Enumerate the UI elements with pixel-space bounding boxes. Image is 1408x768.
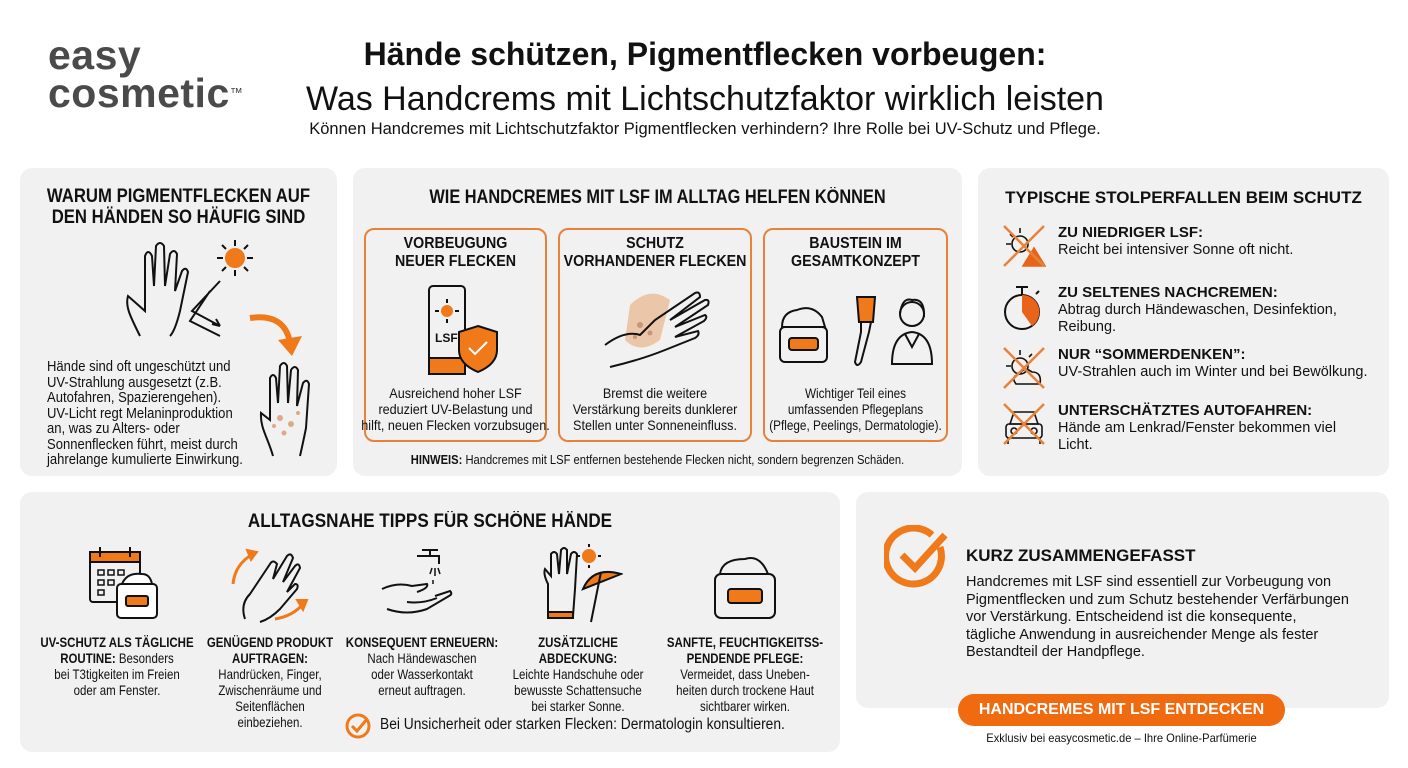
tip: renew: Nach Händewaschen (367, 650, 477, 666)
heading: pitfalls: TYPISCHE STOLPERFALLEN BEIM SCHUTZ (1005, 188, 1362, 207)
tip: renew: erneut auftragen. (378, 682, 466, 698)
text: causes (46, 359, 243, 468)
tip: renew: oder Wasserkontakt (371, 666, 473, 682)
logo (48, 32, 243, 116)
button: discover: HANDCREMES MIT LSF ENTDECKEN (979, 701, 1264, 718)
arrow (250, 314, 302, 356)
icon: jar, brush, doctor (779, 296, 933, 366)
title (306, 36, 1104, 118)
title: Was Handcrems mit Lichtschutzfaktor wirklich leisten (306, 80, 1104, 118)
title: Hände schützen, Pigmentflecken vorbeugen: (364, 36, 1046, 72)
card: prevention: Ausreichend hoher LSF (389, 385, 522, 401)
text: causes: jahrelange kumulierte Einwirkung. (47, 452, 243, 468)
card: prevention: reduziert UV-Belastung und (378, 401, 533, 417)
text: causes: UV-Strahlung ausgesetzt (z.B. (47, 374, 222, 390)
tip: routine: oder am Fenster. (74, 682, 160, 698)
heading: causes: WARUM PIGMENTFLECKEN AUF (47, 186, 310, 207)
text: summary: Pigmentflecken und zum Schutz bestehender Verfärbungen (966, 592, 1349, 608)
tip: care: sichtbarer wirken. (700, 698, 790, 714)
tip: cover: bei starker Sonne. (531, 698, 625, 714)
item: summer thinking (1003, 346, 1368, 389)
icon: hand with spots (260, 362, 310, 456)
card: concept: umfassenden Pflegeplans (788, 401, 923, 417)
tip: care: SANFTE, FEUCHTIGKEITSS- (667, 634, 823, 650)
panel: summary (856, 492, 1389, 708)
card: prevention: hilft, neuen Flecken vorzubsugen. (361, 417, 550, 433)
text: causes: Autofahren, Spazierengehen). (47, 390, 221, 406)
card: protection: Bremst die weitere (603, 385, 707, 401)
card: prevention: NEUER FLECKEN (395, 253, 516, 270)
icon: hand with sun rays (126, 240, 253, 337)
note: dermatologist: Bei Unsicherheit oder starken Flecken: Dermatologin konsultieren. (380, 716, 785, 733)
card: protection: VORHANDENER FLECKEN (564, 253, 746, 270)
tip: amount: einbeziehen. (237, 714, 303, 730)
logo: cosmetic™ (48, 70, 243, 116)
text: causes: an, was zu Alters- oder (47, 421, 180, 437)
text: summary: vor Verstärkung. Entscheidend ist die konsequente, (966, 609, 1296, 625)
item: reapply (1004, 284, 1337, 335)
heading: causes (46, 186, 310, 228)
card: protection: Stellen unter Sonneneinfluss. (573, 417, 737, 433)
card: protection: Verstärkung bereits dunklerer (573, 401, 737, 417)
icon: hand with spots (604, 292, 710, 368)
item: driving: UNTERSCHÄTZTES AUTOFAHREN: (1058, 402, 1312, 419)
text: summary: Bestandteil der Handpflege. (966, 644, 1145, 660)
item: driving (1003, 402, 1336, 453)
note: dermatologist (346, 714, 785, 738)
tip: amount: Zwischenräume und (218, 682, 322, 698)
subtitle: Können Handcremes mit Lichtschutzfaktor Pigmentflecken verhindern? Ihre Rolle bei UV-Schutz und Pflege. (309, 120, 1101, 138)
item: reapply: ZU SELTENES NACHCREMEN: (1058, 284, 1278, 301)
item: driving: Licht. (1058, 437, 1093, 453)
item: low spf (1003, 224, 1293, 267)
card: concept: BAUSTEIN IM (809, 235, 902, 252)
text: summary (966, 574, 1349, 660)
card: concept (763, 228, 948, 442)
card: concept: (Pflege, Peelings, Dermatologie). (769, 417, 942, 433)
item: low spf: Reicht bei intensiver Sonne oft nicht. (1058, 242, 1293, 258)
heading: help: WIE HANDCREMES MIT LSF IM ALLTAG HELFEN KÖNNEN (429, 187, 886, 208)
note: HINWEIS: Handcremes mit LSF entfernen bestehende Flecken nicht, sondern begrenzen Schäden. (411, 452, 904, 467)
tip: care (667, 557, 823, 714)
heading: summary: KURZ ZUSAMMENGEFASST (966, 546, 1196, 565)
text: summary: Handcremes mit LSF sind essentiell zur Vorbeugung von (966, 574, 1331, 590)
text: causes: Hände sind oft ungeschützt und (47, 359, 231, 375)
text: summary: tägliche Anwendung in ausreichender Menge als fester (966, 626, 1318, 642)
item: summer thinking: NUR “SOMMERDENKEN”: (1058, 346, 1246, 363)
logo: easy (48, 32, 141, 78)
tip: care: heiten durch trockene Haut (676, 682, 814, 698)
tip: care: Vermeidet, dass Uneben- (680, 666, 810, 682)
card: concept: Wichtiger Teil eines (805, 385, 906, 401)
panel: causes (20, 168, 337, 476)
tip: amount: GENÜGEND PRODUKT (207, 634, 333, 650)
tip: care: PENDENDE PFLEGE: (687, 650, 803, 666)
tip: amount: Seitenflächen (235, 698, 305, 714)
card: prevention: VORBEUGUNG (404, 235, 507, 252)
panel: pitfalls (978, 168, 1389, 476)
tip: cover: Leichte Handschuhe oder (513, 666, 643, 682)
item: low spf: ZU NIEDRIGER LSF: (1058, 224, 1203, 241)
item: reapply: Abtrag durch Händewaschen, Desinfektion, (1058, 302, 1337, 318)
tip: amount (207, 548, 333, 730)
heading: tips: ALLTAGSNAHE TIPPS FÜR SCHÖNE HÄNDE (248, 511, 612, 532)
icon: check (884, 525, 948, 588)
tip: routine: bei T3tigkeiten im Freien (54, 666, 180, 682)
tip: renew (346, 549, 498, 698)
card: protection (558, 228, 752, 442)
tip: cover: ZUSÄTZLICHE ABDECKUNG: (538, 634, 618, 666)
tip: amount: Handrücken, Finger, (218, 666, 322, 682)
footer: Exklusiv bei easycosmetic.de – Ihre Online-Parfümerie (986, 731, 1257, 745)
heading: causes: DEN HÄNDEN SO HÄUFIG SIND (52, 207, 305, 228)
tip: renew: KONSEQUENT ERNEUERN: (346, 634, 498, 650)
tip: routine: ROUTINE: Besonders (60, 650, 174, 666)
icon: tube and shield (428, 285, 498, 375)
panel: tips (20, 492, 840, 752)
panel: how creams help (353, 168, 962, 476)
tip: amount: AUFTRAGEN: (232, 650, 308, 666)
icon: tube and shield: LSF (435, 331, 458, 345)
item: driving: Hände am Lenkrad/Fenster bekommen viel (1058, 420, 1336, 436)
item: reapply: Reibung. (1058, 319, 1116, 335)
text: causes: UV-Licht regt Melaninproduktion (47, 406, 233, 422)
tip: routine: UV-SCHUTZ ALS TÄGLICHE (40, 634, 194, 650)
card: protection: SCHUTZ (626, 235, 684, 252)
tip: cover: bewusste Schattensuche (514, 682, 642, 698)
card: prevention (364, 228, 547, 442)
text: causes: Sonnenflecken führt, meist durch (47, 436, 238, 452)
button: discover (958, 694, 1285, 726)
item: summer thinking: UV-Strahlen auch im Winter und bei Bewölkung. (1058, 364, 1368, 380)
tip: routine (40, 547, 194, 698)
card: concept: GESAMTKONZEPT (791, 253, 920, 270)
tip: cover (513, 544, 644, 714)
